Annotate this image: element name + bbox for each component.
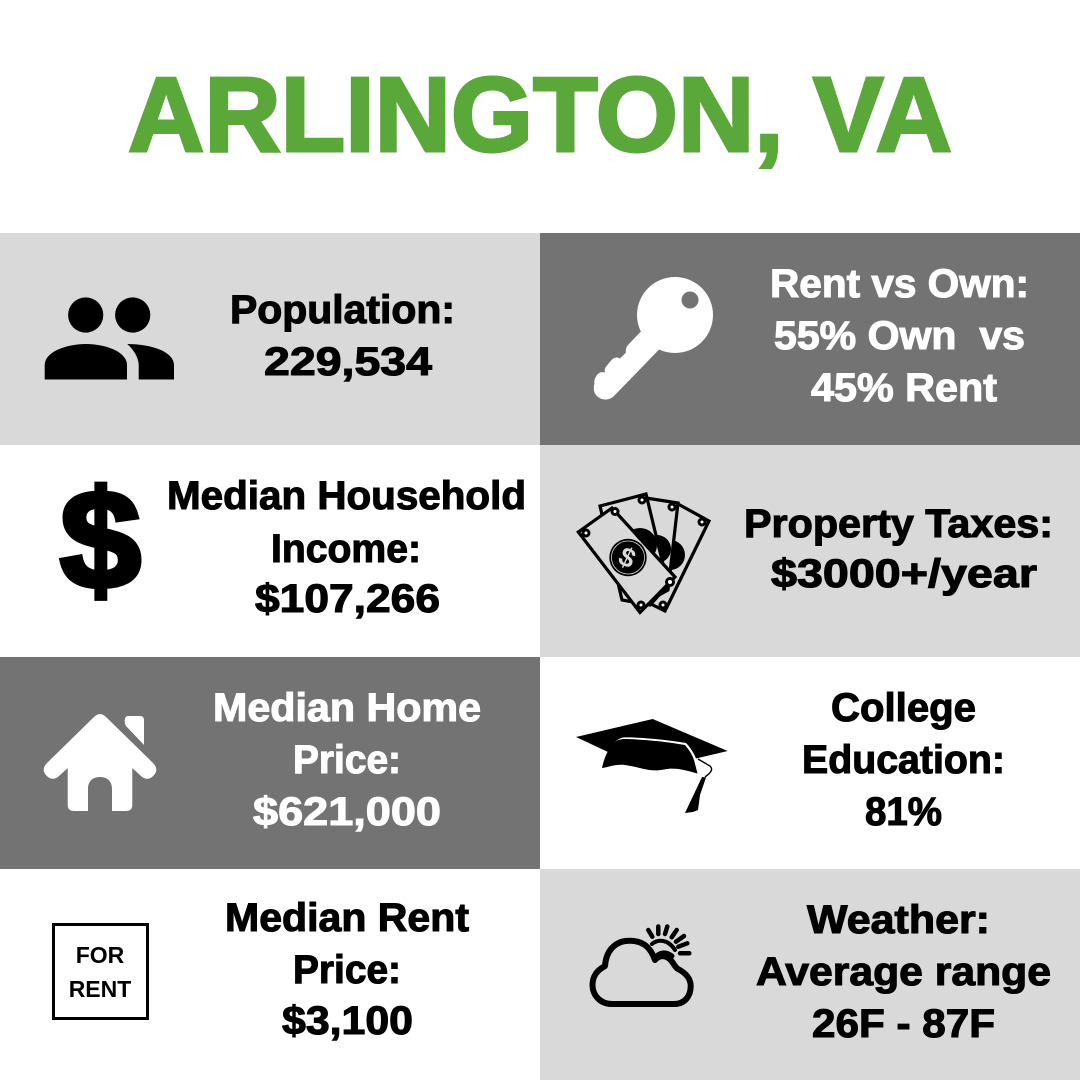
- population text: Population:: [230, 288, 455, 332]
- icon: cloud and sun: [592, 926, 691, 1004]
- panel: rent vs own: [540, 233, 1080, 445]
- panel: median rent price: [0, 869, 540, 1080]
- college education text: 81%: [865, 790, 942, 834]
- rent price text: $3,100: [282, 999, 413, 1043]
- property taxes text: $3000+/year: [771, 552, 1037, 596]
- rent vs own text: 55% Own vs: [774, 314, 1025, 358]
- college education text: [802, 686, 1005, 834]
- panel: median home price: [0, 657, 540, 869]
- weather text: 26F - 87F: [812, 1002, 995, 1046]
- panel: weather: [540, 869, 1080, 1080]
- income text: [167, 474, 526, 621]
- rent price text: [225, 896, 469, 1043]
- property taxes text: [744, 502, 1053, 596]
- panel: college education: [540, 657, 1080, 869]
- population text: [230, 288, 455, 384]
- title: ARLINGTON, VA: [128, 56, 952, 174]
- icon: graduation cap: [576, 719, 728, 813]
- rent vs own text: [770, 262, 1029, 410]
- home price text: Price:: [293, 738, 401, 782]
- home price text: [213, 686, 481, 834]
- home price text: $621,000: [253, 790, 441, 834]
- icon: key: [594, 277, 713, 400]
- icon: people: [45, 297, 174, 380]
- home price text: Median Home: [213, 686, 481, 730]
- rent price text: Price:: [293, 948, 401, 992]
- panel: median household income: [0, 445, 540, 657]
- income text: Median Household: [167, 474, 526, 518]
- rent vs own text: 45% Rent: [811, 366, 997, 410]
- icon: for rent sign: RENT: [69, 976, 131, 1002]
- icon: dollar sign: $: [60, 461, 141, 618]
- income text: Income:: [271, 527, 421, 571]
- icon: money bills: $: [614, 541, 640, 574]
- icon: money bills: [578, 494, 709, 612]
- weather text: Average range: [756, 950, 1051, 994]
- panel: population: [0, 233, 540, 445]
- weather text: [756, 898, 1051, 1046]
- rent vs own text: Rent vs Own:: [770, 262, 1029, 306]
- rent price text: Median Rent: [225, 896, 469, 940]
- icon: house: [44, 714, 156, 811]
- college education text: College: [831, 686, 976, 730]
- population text: 229,534: [264, 340, 433, 384]
- icon: for rent sign: FOR: [76, 942, 125, 968]
- college education text: Education:: [802, 738, 1005, 782]
- icon: for rent sign: [54, 924, 148, 1018]
- property taxes text: Property Taxes:: [744, 502, 1053, 546]
- panel: property taxes: [540, 445, 1080, 657]
- weather text: Weather:: [807, 898, 990, 942]
- income text: $107,266: [255, 577, 440, 621]
